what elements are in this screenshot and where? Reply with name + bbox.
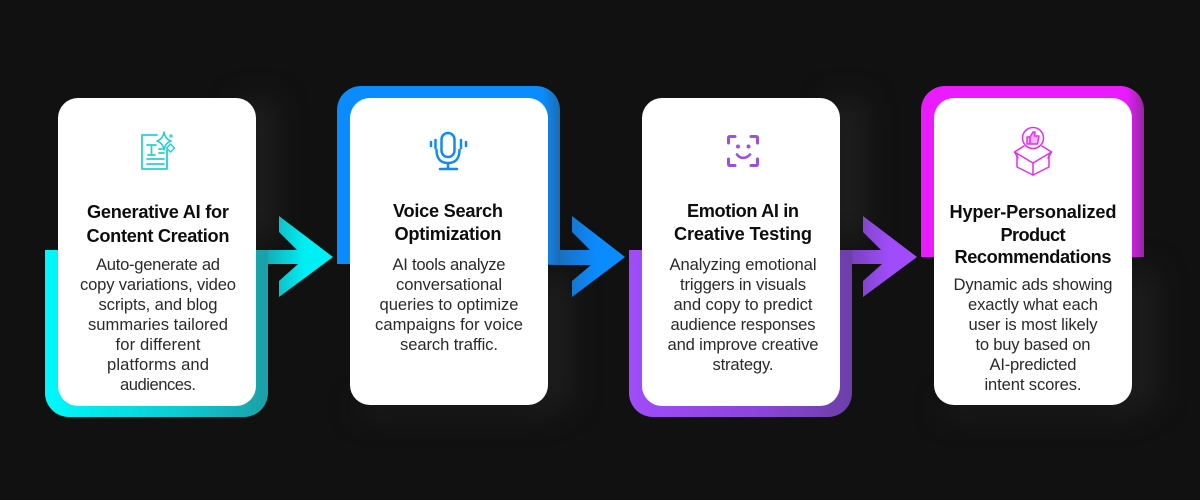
body text: user is most likely [968,315,1098,334]
icon: document with sparkles [142,132,174,169]
icon: box with thumbs up [1014,128,1052,175]
heading: Recommendations [954,247,1112,267]
heading [393,201,503,244]
body text: audiences. [120,375,196,394]
body text: to buy based on [976,335,1090,354]
arrow 3 [840,216,917,297]
panel: Generative AI [45,98,268,417]
body text [954,275,1112,394]
body text: strategy. [712,355,774,374]
body text: for different [116,335,201,354]
body text: audience responses [670,315,816,334]
heading: Optimization [394,224,502,244]
icon: smiling face scan [728,136,758,166]
arrow 1 [256,216,333,297]
body text: AI-predicted [990,355,1076,374]
body text [375,255,523,354]
icon: microphone [431,133,466,169]
heading [950,202,1116,267]
heading: Product [1000,225,1066,245]
body text: AI tools analyze [392,255,506,274]
body text: intent scores. [984,375,1082,394]
heading: Generative AI for [87,202,229,222]
panel: Hyper-Personalized [921,86,1144,405]
heading [674,201,812,244]
heading: Hyper-Personalized [950,202,1116,222]
body text: triggers in visuals [680,275,806,294]
heading [86,202,230,246]
heading: Content Creation [86,226,230,246]
body text: and improve creative [668,335,818,354]
body text [80,255,236,394]
body text: platforms and [107,355,209,374]
body text: search traffic. [400,335,498,354]
heading: Voice Search [393,201,503,221]
heading: Emotion AI in [687,201,799,221]
body text [668,255,818,374]
body text: copy variations, video [80,275,236,294]
body text: queries to optimize [380,295,518,314]
body text: Analyzing emotional [670,255,816,274]
body text: Auto-generate ad [96,255,220,274]
panel: Emotion AI [629,98,852,417]
body text: and copy to predict [674,295,813,314]
heading: Creative Testing [674,224,812,244]
body text: summaries tailored [88,315,228,334]
body text: campaigns for voice [375,315,523,334]
body text: exactly what each [968,295,1098,314]
body text: Dynamic ads showing [954,275,1112,294]
body text: scripts, and blog [98,295,218,314]
panel: Voice Search [337,86,560,405]
body text: conversational [396,275,502,294]
arrow 2 [548,216,625,297]
